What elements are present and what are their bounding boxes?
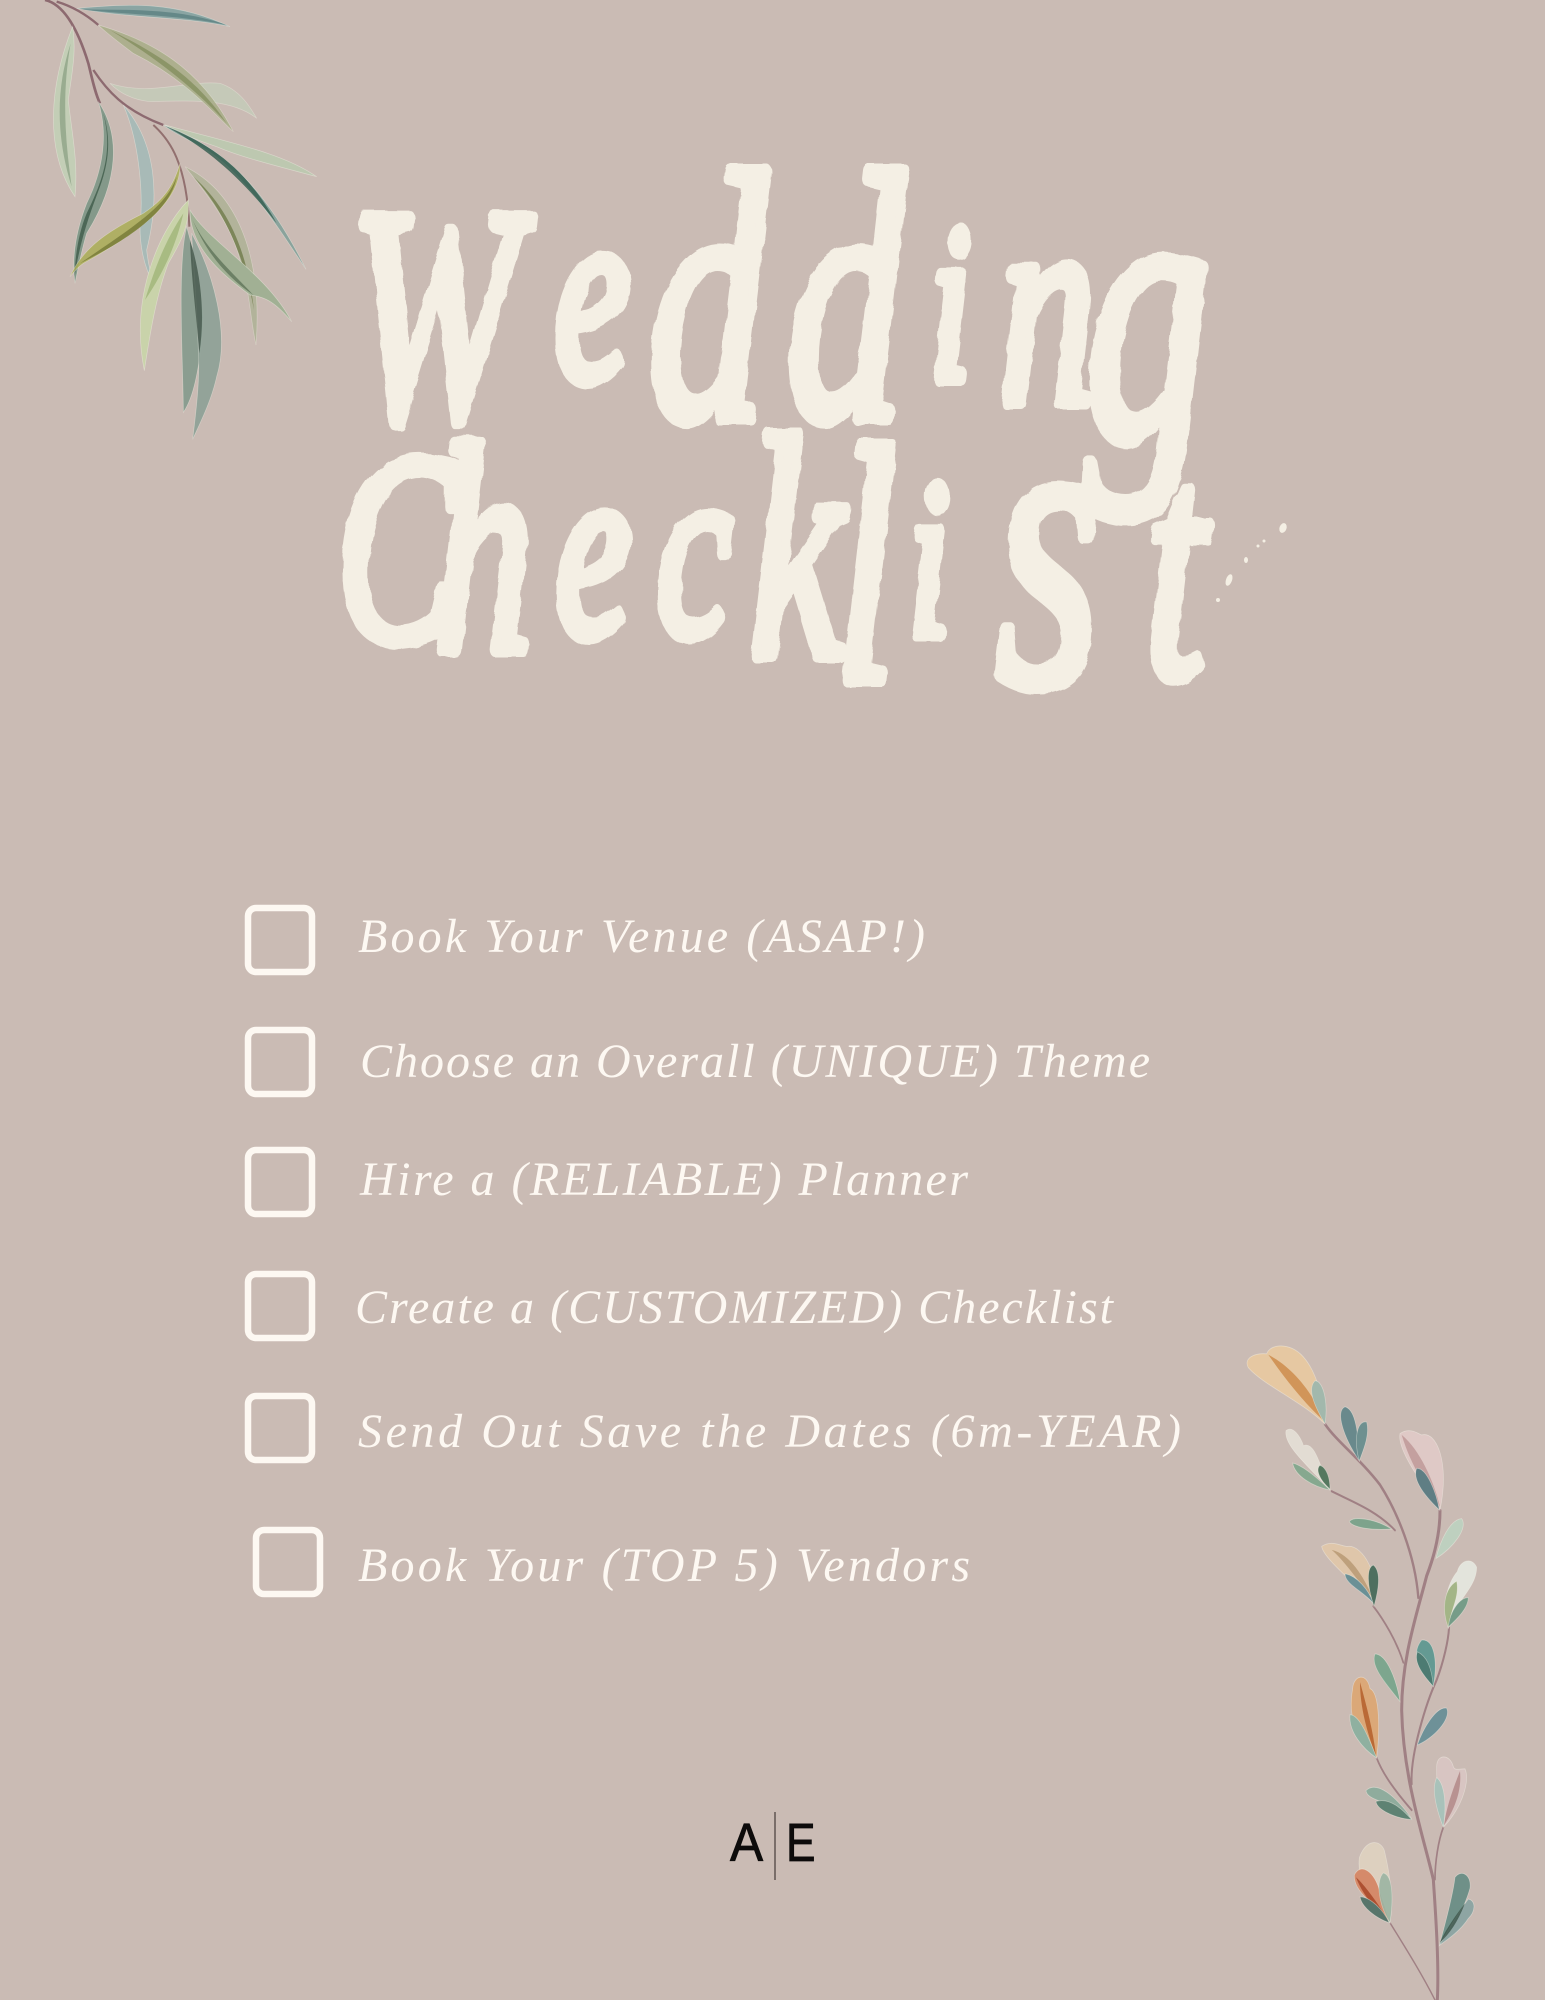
title line: Wedding: d: [649, 102, 770, 496]
checklist item 1: Book Your Venue (ASAP!): [358, 910, 925, 963]
checklist item 2: Choose an Overall (UNIQUE) Theme: [360, 1035, 1150, 1088]
title line: Wedding: e: [554, 151, 629, 434]
title line: Wedding: W: [350, 147, 536, 485]
logo: A | E monogram: E: [786, 1813, 816, 1873]
title line: Checklist: [337, 315, 1213, 774]
checklist item 4: Create a (CUSTOMIZED) Checklist: [355, 1281, 1115, 1334]
title line: Wedding: [350, 99, 1210, 521]
logo: A | E monogram: A: [730, 1812, 764, 1872]
title line: Checklist: s: [995, 315, 1102, 774]
title line: Wedding: d: [787, 102, 908, 496]
checklist: [248, 908, 1181, 1594]
title line: Checklist: e: [556, 407, 631, 690]
checklist item 1: [248, 908, 925, 972]
title line: Checklist: c: [657, 407, 732, 690]
title line: Checklist: l: [835, 379, 897, 753]
icon: floral sprig bottom right: [1247, 1346, 1477, 2000]
title line: Checklist: i: [908, 433, 950, 685]
checklist item 3: [248, 1150, 968, 1214]
title line: Wedding: i: [930, 177, 972, 429]
title ink spatter: [1216, 522, 1288, 602]
title line: Checklist: h: [434, 384, 533, 715]
checklist item 5: Send Out Save the Dates (6m-YEAR): [358, 1405, 1181, 1458]
title line: Checklist: t: [1145, 383, 1213, 748]
logo: A | E monogram: [730, 1812, 816, 1880]
title: [337, 99, 1213, 774]
title line: Checklist: k: [750, 370, 849, 726]
checklist item 6: Book Your (TOP 5) Vendors: [358, 1539, 970, 1592]
title line: Wedding: g: [1085, 99, 1210, 521]
title line: Wedding: n: [1000, 146, 1096, 467]
title line: Checklist: C: [337, 398, 458, 699]
icon: eucalyptus branch top left: [45, 0, 317, 439]
checklist item 3: Hire a (RELIABLE) Planner: [359, 1153, 968, 1206]
